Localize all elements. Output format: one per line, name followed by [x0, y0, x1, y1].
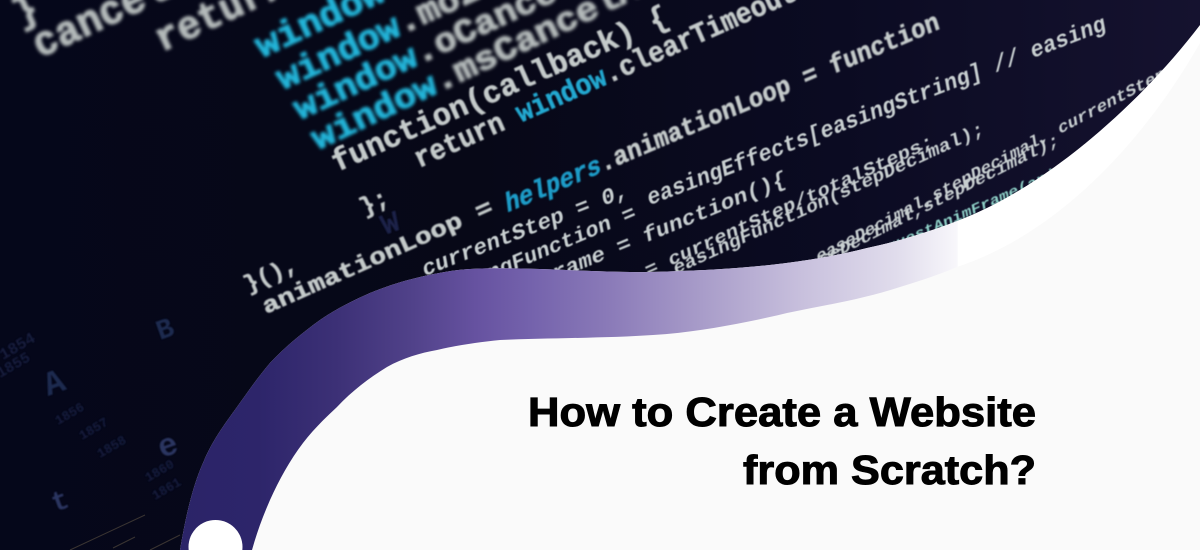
dim background glyphs: A — [39, 363, 71, 406]
off-white content panel — [252, 43, 1200, 550]
medium code lines: helpers.animationLoop = function — [502, 7, 943, 220]
faint scan lines — [70, 515, 180, 550]
medium code lines — [240, 0, 943, 320]
dim background glyphs: 1861 — [150, 475, 184, 503]
purple gradient swoosh — [180, 221, 958, 550]
small sharp code lines: easingEffects[easingString] // easing — [643, 12, 1110, 212]
dim background glyphs: 1856 — [52, 400, 87, 428]
medium code lines: function(callback) { — [327, 1, 675, 181]
small sharp code lines: = currentStep/totalSteps; — [642, 133, 937, 281]
small sharp code lines: ngFunction = — [484, 203, 640, 286]
medium code lines: animationLoop = — [258, 195, 497, 320]
small sharp code lines: rame = function(){ — [549, 169, 791, 286]
dim background glyphs: 1860 — [142, 457, 177, 485]
small sharp code lines — [418, 12, 1169, 293]
dim background glyphs: e — [153, 426, 183, 467]
small sharp code lines: easingFunction(stepDecimal); — [670, 120, 988, 279]
dim background glyphs: 1857 — [76, 415, 111, 443]
dim background glyphs: t — [47, 486, 74, 520]
title: from Scratch? — [743, 447, 1036, 493]
dim background glyphs: W — [377, 206, 405, 244]
small sharp code lines: easeDecimal,stepDecimal); — [795, 131, 1062, 281]
dim background glyphs: 1858 — [94, 433, 129, 461]
large blurred code lines — [7, 0, 828, 160]
dim background glyphs — [0, 206, 405, 520]
small sharp code lines: requestAnimFrame(anim — [866, 162, 1069, 265]
white circle — [188, 520, 242, 550]
title — [528, 389, 1036, 493]
medium code lines: }; — [356, 186, 394, 222]
dim background glyphs: B — [152, 314, 179, 348]
title: How to Create a Website — [528, 389, 1036, 435]
small sharp code lines: currentStep = 0, — [418, 179, 632, 283]
medium code lines: }(), — [240, 252, 301, 298]
small sharp code lines: ance,easeDecimal,stepDecimal, currentStep — [765, 65, 1169, 293]
